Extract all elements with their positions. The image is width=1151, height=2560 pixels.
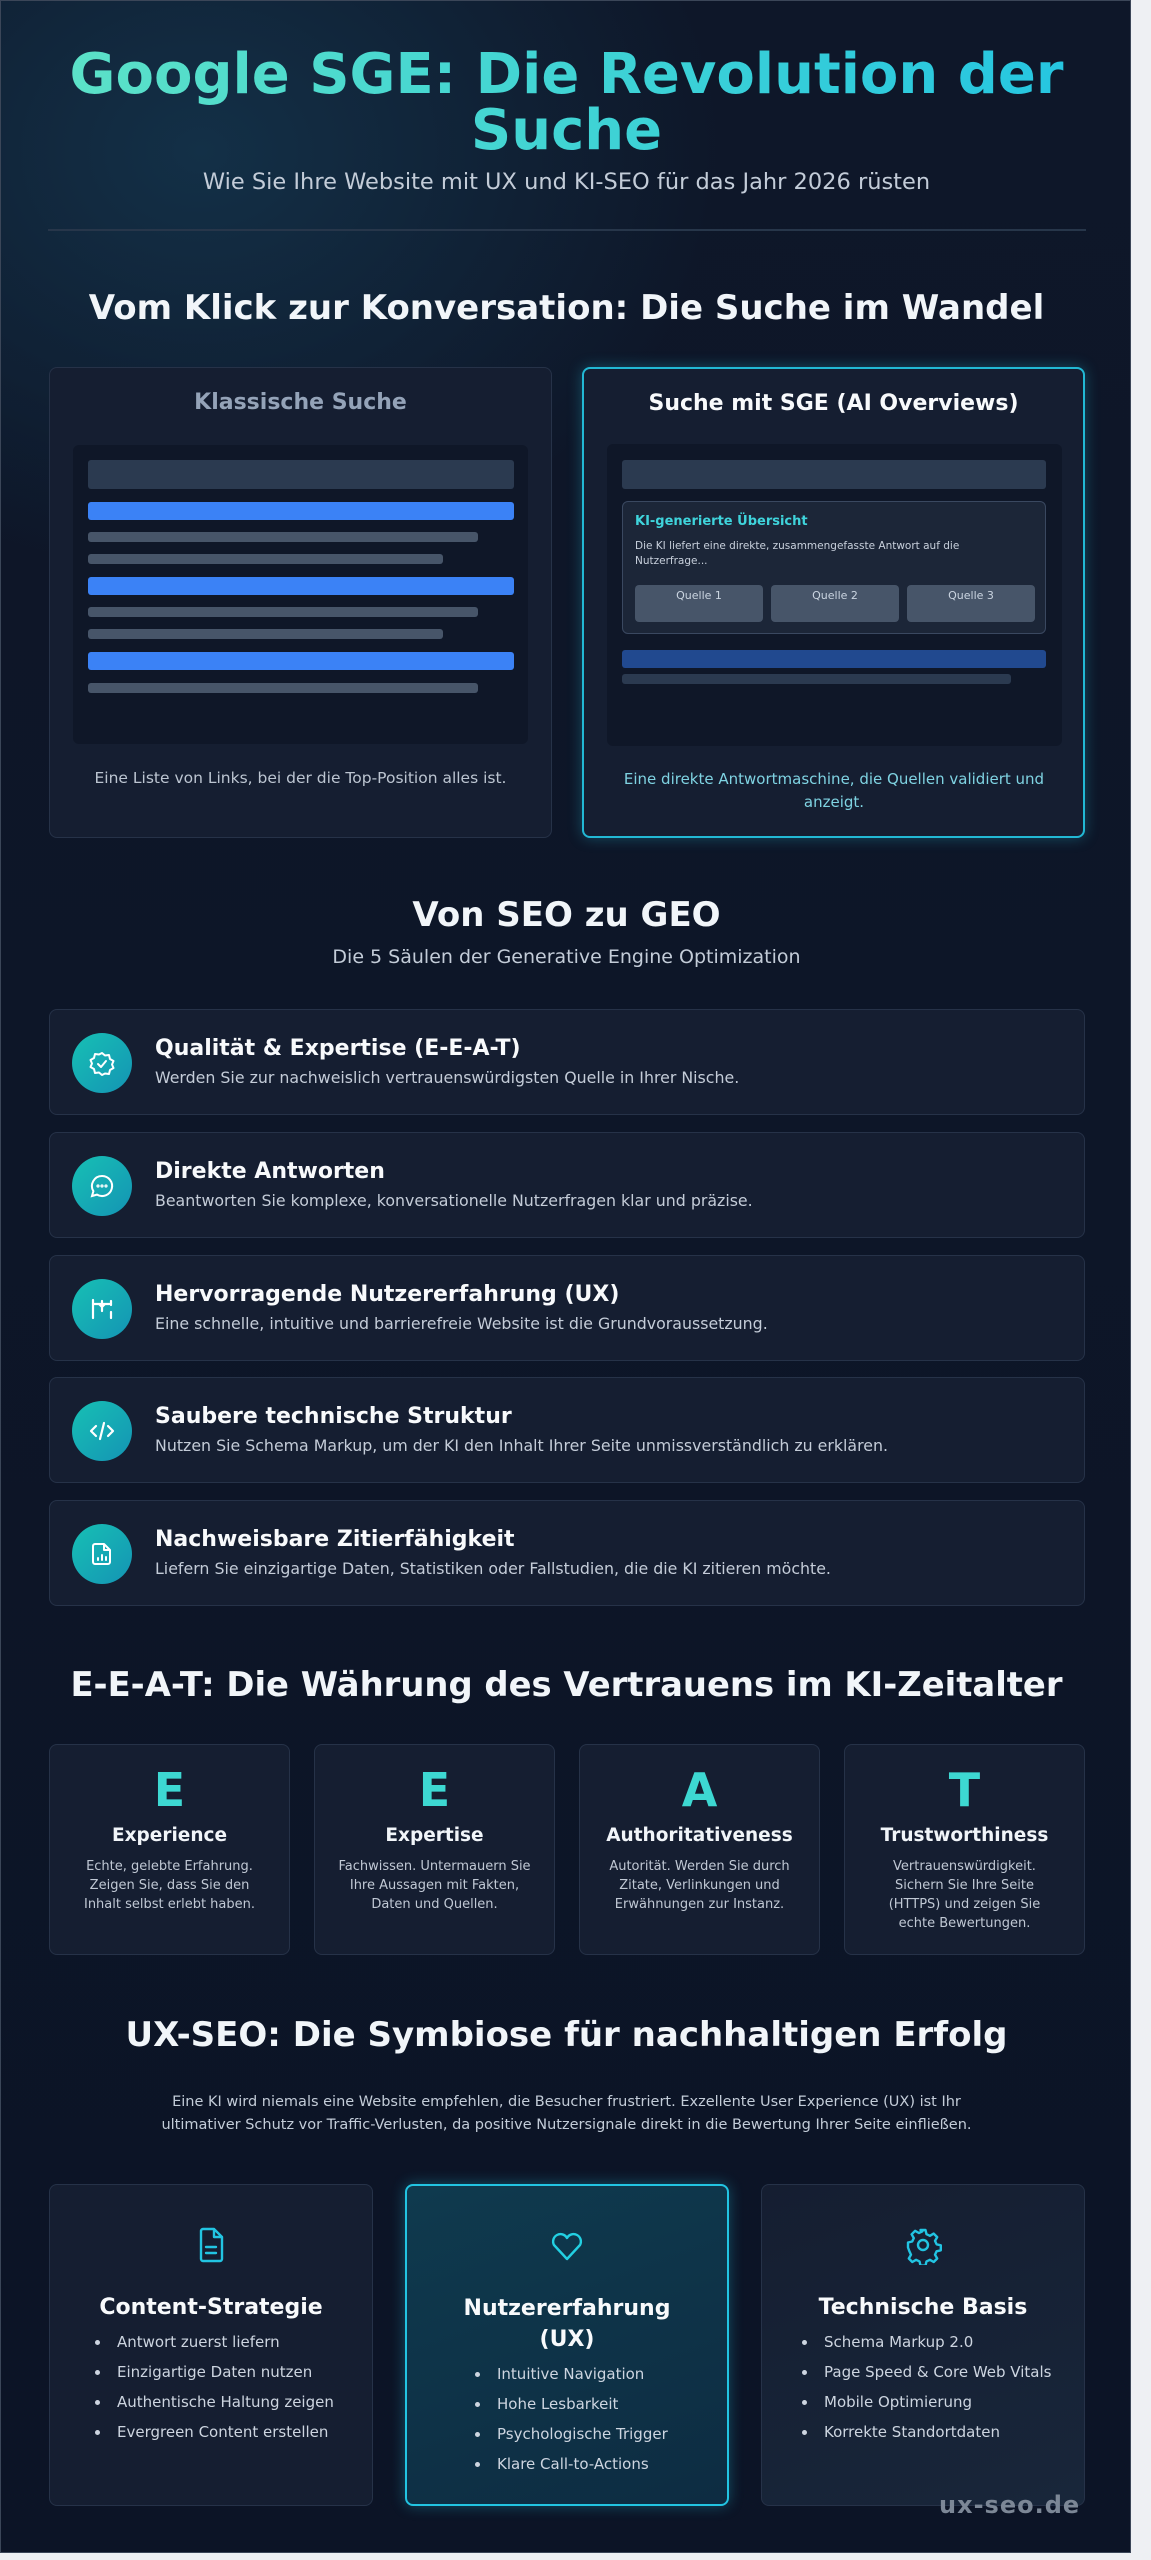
AI overview box: Quelle 1 bbox=[676, 589, 722, 602]
pillar 4: Saubere technische Struktur bbox=[155, 1404, 512, 1429]
card: Experience: Echte, gelebte Erfahrung. Zeigen Sie, dass Sie den Inhalt selbst erlebt haben. bbox=[84, 1859, 255, 1912]
AI overview box: Quelle 3 bbox=[948, 589, 994, 602]
card: Authoritativeness: Authoritativeness bbox=[606, 1825, 793, 1846]
icon: badge check bbox=[72, 1033, 132, 1093]
card: Trustworthiness bbox=[844, 1744, 1085, 1955]
pillar 3 bbox=[49, 1255, 1085, 1361]
card: Authoritativeness: A bbox=[682, 1763, 717, 1817]
card: Nutzererfahrung (highlight): Intuitive Navigation bbox=[497, 2365, 644, 2383]
card: Expertise: Expertise bbox=[385, 1825, 484, 1846]
card: Nutzererfahrung (highlight): Nutzererfahrung bbox=[464, 2296, 670, 2321]
card: Technische Basis: Korrekte Standortdaten bbox=[824, 2423, 1000, 2441]
card: Technische Basis: Page Speed & Core Web Vitals bbox=[824, 2363, 1051, 2381]
AI overview box bbox=[622, 501, 1046, 634]
card: Expertise: E bbox=[419, 1763, 450, 1817]
card: Experience: Experience bbox=[112, 1825, 227, 1846]
card title: Suche mit SGE (AI Overviews) bbox=[648, 391, 1019, 416]
card: Authoritativeness: Autorität. Werden Sie durch Zitate, Verlinkungen und Erwähnungen zur Instanz. bbox=[609, 1859, 790, 1912]
panel: Suche mit SGE bbox=[582, 367, 1085, 838]
card: Expertise: Fachwissen. Untermauern Sie Ihre Aussagen mit Fakten, Daten und Quellen. bbox=[338, 1859, 531, 1912]
card: Nutzererfahrung (highlight): Klare Call-to-Actions bbox=[497, 2455, 649, 2473]
card: Technische Basis: Technische Basis bbox=[819, 2295, 1027, 2320]
pillar 1 bbox=[49, 1009, 1085, 1115]
card: Expertise bbox=[314, 1744, 555, 1955]
AI overview box: Die KI liefert eine direkte, zusammengefasste Antwort auf die Nutzerfrage... bbox=[635, 540, 959, 567]
pillar 5: Liefern Sie einzigartige Daten, Statistiken oder Fallstudien, die die KI zitieren möchte. bbox=[155, 1559, 831, 1578]
icon: chat bubble bbox=[72, 1156, 132, 1216]
card: Content-Strategie: Evergreen Content erstellen bbox=[117, 2423, 328, 2441]
title bbox=[1, 47, 1132, 159]
icon: code bbox=[72, 1401, 132, 1461]
heading: UX-SEO: UX-SEO: Die Symbiose für nachhaltigen Erfolg bbox=[126, 2015, 1007, 2055]
pillar 1: Werden Sie zur nachweislich vertrauenswürdigsten Quelle in Ihrer Nische. bbox=[155, 1068, 739, 1087]
card: Technische Basis bbox=[761, 2184, 1085, 2506]
pillar 2 bbox=[49, 1132, 1085, 1238]
pillar 3: Hervorragende Nutzererfahrung (UX) bbox=[155, 1282, 619, 1307]
subtitle: Wie Sie Ihre Website mit UX und KI-SEO für das Jahr 2026 rüsten bbox=[203, 169, 930, 195]
subheading: Die 5 Säulen der Generative Engine Optimization bbox=[332, 946, 801, 968]
pillar 1: Qualität & Expertise (E-E-A-T) bbox=[155, 1036, 521, 1061]
pillar 2: Direkte Antworten bbox=[155, 1159, 385, 1184]
pillar 4 bbox=[49, 1377, 1085, 1483]
card: Experience: E bbox=[154, 1763, 185, 1817]
AI overview box: KI-generierte Übersicht bbox=[635, 514, 808, 529]
card: Content-Strategie: Antwort zuerst liefern bbox=[117, 2333, 280, 2351]
icon: document chart bbox=[72, 1524, 132, 1584]
caption: Eine Liste von Links, bei der die Top-Position alles ist. bbox=[94, 769, 506, 787]
title: Google SGE: Die Revolution der bbox=[70, 42, 1063, 107]
title: Suche bbox=[471, 98, 662, 163]
heading: Von SEO zu GEO: Von SEO zu GEO bbox=[412, 895, 721, 935]
icon: ux bbox=[72, 1279, 132, 1339]
card: Experience bbox=[49, 1744, 290, 1955]
intro paragraph: Eine KI wird niemals eine Website empfehlen, die Besucher frustriert. Exzellente User Experience (UX) ist Ihr ultimativer Schutz vor Traffic-Verlusten, da positive Nutzersignale direkt in die Bewertung Ihrer Seite einfließen. bbox=[161, 2094, 972, 2133]
watermark: ux-seo.de bbox=[939, 2491, 1080, 2519]
card: Content-Strategie: Content-Strategie bbox=[99, 2295, 323, 2320]
card title: Klassische Suche bbox=[194, 390, 407, 415]
card: Technische Basis: Mobile Optimierung bbox=[824, 2393, 972, 2411]
AI overview box: Quelle 2 bbox=[812, 589, 858, 602]
pillar 3: Eine schnelle, intuitive und barrierefreie Website ist die Grundvoraussetzung. bbox=[155, 1314, 768, 1333]
card: Nutzererfahrung (highlight) bbox=[405, 2184, 729, 2506]
pillar 4: Nutzen Sie Schema Markup, um der KI den Inhalt Ihrer Seite unmissverständlich zu erklären. bbox=[155, 1436, 888, 1455]
icon: document bbox=[200, 2228, 224, 2262]
caption: Eine direkte Antwortmaschine, die Quellen validiert und anzeigt. bbox=[624, 770, 1044, 811]
card: Content-Strategie: Authentische Haltung zeigen bbox=[117, 2393, 334, 2411]
heading: E-E-A-T: E-E-A-T: Die Währung des Vertrauens im KI-Zeitalter bbox=[70, 1665, 1063, 1704]
card: Content-Strategie bbox=[49, 2184, 373, 2506]
card: Technische Basis: Schema Markup 2.0 bbox=[824, 2333, 973, 2351]
card: Trustworthiness: T bbox=[949, 1763, 980, 1817]
pillar 5 bbox=[49, 1500, 1085, 1606]
card: Nutzererfahrung (highlight): Psychologische Trigger bbox=[497, 2425, 668, 2443]
card: Nutzererfahrung (highlight): (UX) bbox=[540, 2327, 594, 2352]
icon: gear bbox=[906, 2228, 942, 2265]
pillar 2: Beantworten Sie komplexe, konversationelle Nutzerfragen klar und präzise. bbox=[155, 1191, 753, 1210]
mock: AI overview bbox=[607, 444, 1062, 746]
pillar 5: Nachweisbare Zitierfähigkeit bbox=[155, 1527, 515, 1552]
panel: klassische Suche bbox=[49, 367, 552, 838]
icon: heart bbox=[552, 2232, 582, 2260]
card: Trustworthiness: Vertrauenswürdigkeit. Sichern Sie Ihre Seite (HTTPS) und zeigen Sie echte Bewertungen. bbox=[889, 1859, 1040, 1931]
card: Nutzererfahrung (highlight): Hohe Lesbarkeit bbox=[497, 2395, 618, 2413]
card: Trustworthiness: Trustworthiness bbox=[881, 1825, 1048, 1846]
card: Authoritativeness bbox=[579, 1744, 820, 1955]
mock: search results list bbox=[73, 445, 528, 744]
card: Content-Strategie: Einzigartige Daten nutzen bbox=[117, 2363, 312, 2381]
heading: Vom Klick zur Konversation: Vom Klick zur Konversation: Die Suche im Wandel bbox=[89, 288, 1044, 328]
